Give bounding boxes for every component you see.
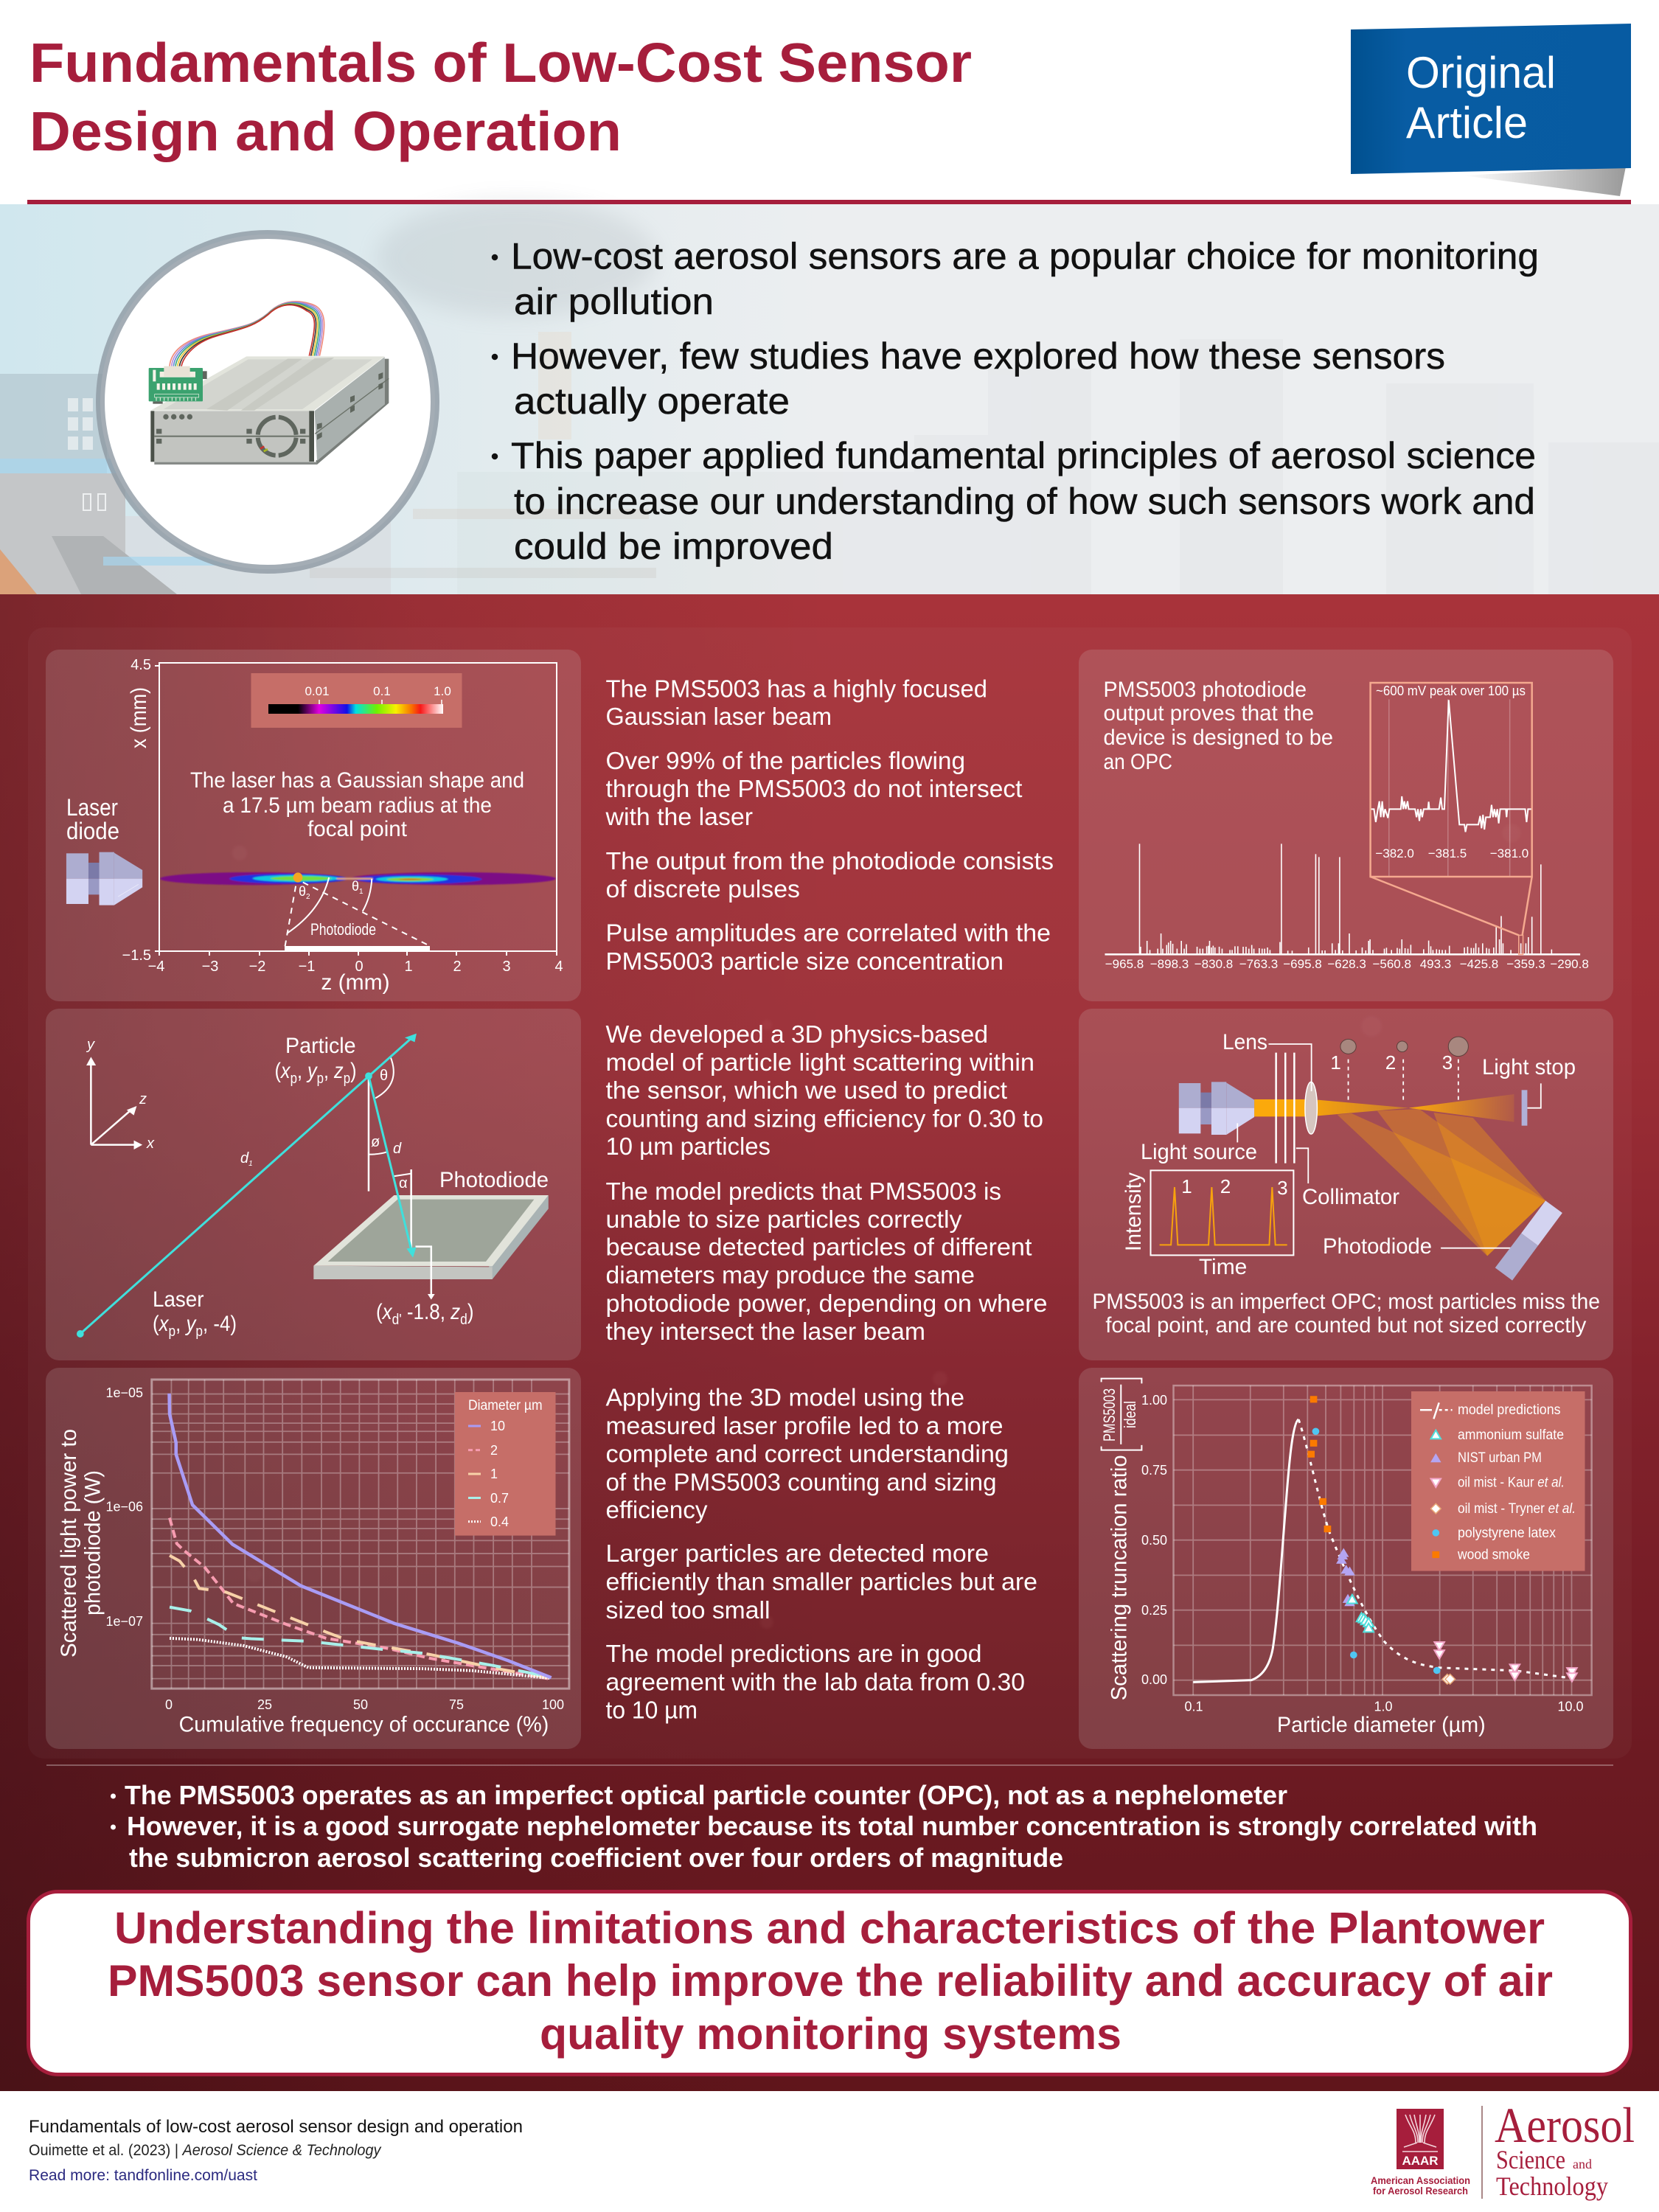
laser beam profile [160, 872, 556, 885]
beam annotation: a 17.5 µm beam radius at the [223, 793, 492, 818]
label: detector coordinate: -1.8, [402, 1300, 451, 1324]
text: 3D model description: 10 µm particles [606, 1133, 771, 1160]
legend: oil mist - Tryner et al. [1458, 1501, 1576, 1517]
logo: AAAR: for Aerosol Research [1373, 2185, 1468, 2197]
axis tick labels: −3 [202, 959, 218, 975]
text: laser and photodiode findings: Pulse amplitudes are correlated with the [606, 919, 1051, 947]
y axis fraction in brackets: PMS5003 [1100, 1388, 1119, 1441]
label: laser diode [66, 794, 119, 844]
model curve [1193, 1419, 1571, 1682]
angle labels: 1 [359, 888, 364, 896]
text: model results: measured laser profile led to a more [606, 1412, 1003, 1439]
logo: Aerosol Science and Technology [1495, 2097, 1635, 2201]
laser and scattering rays: d [240, 1150, 248, 1166]
laser and scattering rays: ø [371, 1134, 380, 1150]
diagram labels: Photodiode [1323, 1234, 1432, 1259]
axis tick labels: −1.5 [122, 947, 151, 964]
axis tick labels: −4 [148, 959, 164, 975]
text: 3D model description [606, 1020, 1047, 1345]
legend: Diameter µm [468, 1398, 543, 1413]
legend: 0.4 [490, 1514, 509, 1529]
axis tick labels: 4.5 [131, 657, 151, 673]
laser and scattering rays: α [399, 1175, 408, 1192]
colour scale legend: 0.01 [305, 684, 330, 698]
axis labels: 100 [542, 1697, 564, 1712]
text: laser and photodiode findings: PMS5003 particle size concentration [606, 947, 1004, 975]
legend: polystyrene latex [1458, 1526, 1556, 1541]
text: model results: sized too small [606, 1596, 770, 1624]
colour scale legend: 0.1 [373, 684, 391, 698]
axis tick labels: 0.00 [1141, 1672, 1167, 1687]
intro bullet points [492, 236, 1539, 567]
text: laser and photodiode findings: The output from the photodiode consists [606, 847, 1054, 874]
time axis labels: −763.3 [1239, 957, 1278, 971]
beam annotation: The laser has a Gaussian shape and [190, 768, 524, 793]
divider [46, 1764, 1613, 1766]
text: 3D model description: they intersect the laser beam [606, 1318, 925, 1345]
legend: 0.7 [490, 1491, 509, 1506]
y axis fraction in brackets: ideal [1121, 1401, 1139, 1428]
panel caption [1093, 1290, 1600, 1338]
label: detector coordinate: d [460, 1312, 467, 1328]
x axis title: Cumulative frequency of occurance (%) [179, 1713, 549, 1737]
time axis labels: −628.3 [1327, 957, 1366, 971]
legend [1411, 1391, 1585, 1571]
intro bullet points: This paper applied fundamental principles of aerosol science [511, 435, 1536, 476]
intensity inset [1151, 1170, 1293, 1255]
axis labels: 1e−05 [105, 1385, 143, 1400]
time axis labels: −695.8 [1283, 957, 1322, 971]
axis tick labels: −2 [249, 959, 265, 975]
text: laser and photodiode findings [605, 675, 1054, 975]
axis tick labels: 10.0 [1557, 1700, 1584, 1714]
label: particle: p [344, 1071, 350, 1087]
legend [455, 1392, 556, 1536]
particle numbers: 1 [1330, 1051, 1341, 1074]
logo: Aerosol Science and Technology: Science [1496, 2145, 1565, 2174]
label: detector coordinate: z [450, 1300, 460, 1324]
logo: Aerosol Science and Technology: and [1573, 2157, 1592, 2171]
plot frame and axes [155, 663, 557, 956]
coordinate axes: x [146, 1135, 155, 1152]
text: 3D model description: The model predicts that PMS5003 is [606, 1178, 1001, 1205]
light stop [1522, 1090, 1527, 1126]
y axis title [57, 1429, 105, 1658]
coordinate axes: z [139, 1091, 147, 1107]
laser and scattering rays: d [393, 1141, 402, 1157]
axis tick labels: 4 [554, 959, 563, 975]
label: laser: , [175, 1312, 187, 1336]
laser beam [1254, 1094, 1514, 1122]
axis title: z: z (mm) [321, 970, 390, 995]
label: particle [274, 1034, 357, 1087]
particle numbers [1181, 1051, 1453, 1199]
label: particle: Particle [285, 1034, 356, 1058]
logo: AAAR [1371, 2109, 1470, 2197]
label: particle: , [324, 1059, 334, 1083]
title: Design and Operation [29, 100, 622, 162]
logo: Aerosol Science and Technology: Technology [1496, 2171, 1608, 2201]
red background section [0, 594, 1659, 2091]
label: photodiode: Photodiode [439, 1168, 549, 1192]
intro bullet points: Low-cost aerosol sensors are a popular choice for monitoring [511, 236, 1539, 277]
text: 3D model description: model of particle light scattering within [606, 1048, 1034, 1076]
panel: imperfect OPC diagram [1079, 1009, 1613, 1360]
badge: original article: Original [1406, 48, 1556, 97]
title: Fundamentals of Low-Cost Sensor [29, 32, 972, 94]
intro panel: background city [0, 199, 1659, 595]
callout: conclusion: PMS5003 sensor can help improve the reliability and accuracy of air [108, 1956, 1553, 2006]
panel: scattered light chart [46, 1368, 581, 1749]
angle labels [299, 879, 364, 901]
legend: model predictions [1458, 1402, 1560, 1418]
label: particle: y [306, 1059, 318, 1083]
text: 3D model description: diameters may produce the same [606, 1262, 975, 1289]
axis tick labels: 1.0 [1374, 1700, 1393, 1714]
collimator and leader lines [1237, 1044, 1541, 1248]
photodiode [1495, 1200, 1562, 1281]
text: laser and photodiode findings: with the laser [605, 803, 753, 830]
label: photodiode: Photodiode [310, 920, 376, 939]
colour scale legend [251, 673, 462, 728]
axis labels [105, 1385, 564, 1712]
particles [1340, 1037, 1468, 1057]
particle numbers: 2 [1220, 1175, 1231, 1197]
text: 3D model description: the sensor, which we used to predict [606, 1077, 1007, 1104]
logo: AAAR: AAAR [1402, 2154, 1439, 2168]
text: model results: Applying the 3D model using the [606, 1384, 964, 1411]
axis tick labels: 0 [355, 959, 364, 975]
label: laser [153, 1287, 237, 1340]
logo divider [1481, 2106, 1483, 2199]
intro bullet points: actually operate [514, 380, 790, 422]
panel: 3D model geometry [46, 1009, 581, 1360]
scattering geometry lines [285, 877, 428, 946]
time axis labels [1105, 957, 1589, 971]
label: laser: , -4) [203, 1312, 237, 1336]
text: 3D model description: counting and sizing efficiency for 0.30 to [606, 1105, 1043, 1133]
diagram labels: Lens [1222, 1030, 1267, 1054]
label: laser: (x [153, 1312, 170, 1336]
legend: wood smoke [1457, 1548, 1530, 1563]
time axis labels: −359.3 [1506, 957, 1545, 971]
diagram labels: Intensity [1121, 1172, 1146, 1251]
panel text: an OPC [1103, 750, 1172, 774]
panel: truncation ratio chart [1079, 1368, 1613, 1749]
diagram labels [1121, 1030, 1576, 1279]
footer citation: Ouimette et al. (2023) | Aerosol Science & Technology [29, 2142, 382, 2159]
logo: AAAR: American Association [1371, 2174, 1470, 2186]
text: model results: The model predictions are in good [606, 1640, 982, 1667]
grid [1174, 1385, 1592, 1695]
scattered light beams [1338, 1109, 1545, 1256]
axis labels: 50 [353, 1697, 368, 1712]
axis labels: 0 [165, 1697, 173, 1712]
zoom inset: ~600 mV peak over 100 µs [1376, 684, 1526, 698]
axis tick labels [1141, 1393, 1584, 1714]
text: 3D model description: We developed a 3D physics-based [606, 1020, 988, 1048]
legend: 1 [490, 1467, 498, 1481]
label: particle: (x [274, 1059, 292, 1083]
text: laser and photodiode findings: Over 99% of the particles flowing [606, 747, 965, 774]
label: detector coordinate: d' [392, 1312, 402, 1328]
axis title: x: x (mm) [127, 687, 151, 748]
axis tick labels: 0.50 [1141, 1533, 1167, 1548]
diagram labels: Light source [1141, 1140, 1257, 1164]
zoom inset: −381.5 [1428, 846, 1467, 860]
axis tick labels: 1 [404, 959, 413, 975]
angle labels: 2 [306, 893, 310, 901]
axis tick labels: 2 [453, 959, 462, 975]
coordinate axes [86, 1037, 155, 1152]
time axis labels: −425.8 [1460, 957, 1498, 971]
zoom inset: −381.0 [1490, 846, 1528, 860]
text: model results: efficiency [606, 1496, 708, 1523]
time axis labels: −965.8 [1105, 957, 1144, 971]
colour scale legend: 1.0 [434, 684, 451, 698]
zoom inset [1371, 683, 1532, 954]
text: laser and photodiode findings: through the PMS5003 do not intersect [606, 775, 1022, 802]
text: 3D model description: because detected particles of different [606, 1233, 1032, 1261]
panel caption: focal point, and are counted but not sized correctly [1105, 1313, 1586, 1338]
panel text [1103, 678, 1333, 774]
text: laser and photodiode findings: Gaussian laser beam [606, 703, 832, 730]
axis tick labels: −1 [299, 959, 315, 975]
text: model results: Larger particles are detected more [606, 1540, 989, 1567]
callout: conclusion: Understanding the limitations and characteristics of the Plantower [114, 1904, 1545, 1953]
y axis title: photodiode (W) [81, 1470, 105, 1615]
pulse time series [1105, 844, 1580, 954]
diagram labels: Light stop [1482, 1055, 1576, 1079]
footer citation: Fundamentals of low-cost aerosol sensor design and operation [29, 2117, 523, 2137]
curves [170, 1394, 552, 1679]
callout: conclusion: quality monitoring systems [540, 2009, 1121, 2059]
beam annotation: focal point [307, 817, 408, 841]
axis tick labels: 0.75 [1141, 1463, 1167, 1478]
text: model results: to 10 µm [606, 1697, 698, 1724]
photodiode bar [285, 946, 430, 951]
time axis labels: −290.8 [1550, 957, 1589, 971]
intro bullet points: air pollution [514, 281, 714, 322]
label: detector coordinate: (x [376, 1300, 394, 1324]
axis labels: 1e−07 [105, 1614, 143, 1629]
intro bullet points: However, few studies have explored how these sensors [511, 335, 1445, 377]
particle numbers: 2 [1385, 1051, 1396, 1074]
text: 3D model description: photodiode power, depending on where [606, 1290, 1047, 1317]
summary bullets: the submicron aerosol scattering coefficient over four orders of magnitude [129, 1843, 1063, 1873]
label: laser diode: Laser [66, 794, 118, 821]
title [29, 32, 972, 162]
diagram labels: Time [1199, 1255, 1247, 1279]
angle labels: θ [299, 884, 306, 899]
icon: lens [1305, 1082, 1317, 1134]
text: model results: of the PMS5003 counting and sizing [606, 1469, 997, 1496]
beam annotation [190, 768, 524, 841]
intro bullet points: to increase our understanding of how such sensors work and [514, 481, 1535, 522]
panel: photodiode output [1079, 650, 1613, 1001]
legend: NIST urban PM [1458, 1450, 1542, 1466]
light path diagram [1151, 1037, 1562, 1281]
legend: oil mist - Kaur et al. [1458, 1475, 1565, 1491]
label: particle: p [317, 1071, 324, 1087]
particle numbers: 3 [1277, 1177, 1288, 1199]
laser and scattering rays: θ [380, 1068, 388, 1084]
label: particle: ) [350, 1059, 357, 1083]
badge: original article: Article [1406, 98, 1528, 147]
laser and scattering rays: 1 [248, 1160, 253, 1168]
label: laser: p [169, 1324, 175, 1340]
zoom inset: −382.0 [1375, 846, 1414, 860]
icon: laser diode [66, 852, 142, 905]
data points [1307, 1396, 1577, 1684]
text: model results: complete and correct understanding [606, 1440, 1009, 1467]
time axis labels: 493.3 [1420, 957, 1451, 971]
axis tick labels: 3 [502, 959, 511, 975]
badge: original article [1351, 24, 1631, 196]
text: laser and photodiode findings: of discrete pulses [606, 875, 800, 902]
footer citation: Read more: tandfonline.com/uast [29, 2167, 257, 2184]
text: model results [606, 1384, 1037, 1724]
axis labels: 1e−06 [105, 1500, 143, 1514]
legend: ammonium sulfate [1458, 1427, 1564, 1443]
y axis title: Scattering truncation ratio [1107, 1455, 1132, 1700]
particle numbers: 1 [1181, 1175, 1192, 1197]
label: particle: z [333, 1059, 344, 1083]
intro bullet points: could be improved [514, 526, 833, 567]
label: detector coordinate: ) [467, 1300, 473, 1324]
callout: conclusion [28, 1892, 1631, 2075]
label: particle: , [297, 1059, 307, 1083]
icon: PMS5003 sensor [149, 302, 389, 465]
time axis labels: −560.8 [1372, 957, 1411, 971]
header rule [27, 200, 1631, 204]
x axis title: Particle diameter (µm) [1277, 1713, 1486, 1737]
text: laser and photodiode findings: The PMS5003 has a highly focused [606, 675, 987, 703]
label: particle: p [291, 1071, 297, 1087]
y axis fraction in brackets [1100, 1379, 1141, 1450]
summary bullets: However, it is a good surrogate nephelometer because its total number concentration is strongly correlated with [127, 1811, 1537, 1841]
time axis labels: −898.3 [1150, 957, 1189, 971]
label: laser: p [195, 1324, 203, 1340]
label: laser: Laser [153, 1287, 204, 1312]
panel text: output proves that the [1103, 701, 1314, 726]
laser and scattering rays [77, 1034, 435, 1338]
legend: 10 [490, 1419, 505, 1433]
photodiode plate [313, 1195, 549, 1279]
label: laser: y [185, 1312, 197, 1336]
summary bullets [111, 1780, 1537, 1873]
text: model results: efficiently than smaller particles but are [606, 1568, 1037, 1596]
label: laser diode: diode [66, 818, 119, 844]
text: 3D model description: unable to size particles correctly [606, 1206, 962, 1233]
particle numbers: 3 [1442, 1051, 1453, 1074]
axis labels: 75 [449, 1697, 464, 1712]
axis tick labels: 0.1 [1184, 1700, 1203, 1714]
panel text: PMS5003 photodiode [1103, 678, 1307, 702]
text: model results: agreement with the lab data from 0.30 [606, 1669, 1025, 1696]
angle labels: θ [352, 879, 359, 894]
logo: Aerosol Science and Technology: Aerosol [1495, 2097, 1635, 2153]
coordinate axes: y [86, 1037, 95, 1053]
axis tick labels [122, 657, 563, 975]
axis tick labels: 0.25 [1141, 1603, 1167, 1618]
panel text: device is designed to be [1103, 726, 1333, 750]
grid [152, 1380, 569, 1688]
axis tick labels: 1.00 [1141, 1393, 1167, 1408]
panel caption: PMS5003 is an imperfect OPC; most particles miss the [1093, 1290, 1600, 1314]
footer citation [29, 2117, 523, 2184]
panel: laser profile [46, 650, 581, 1001]
diagram labels: Collimator [1302, 1185, 1399, 1209]
legend: 2 [490, 1443, 498, 1458]
icon: light source [1179, 1082, 1254, 1135]
summary bullets: The PMS5003 operates as an imperfect optical particle counter (OPC), not as a nephelometer [125, 1780, 1287, 1810]
axis labels: 25 [257, 1697, 272, 1712]
time axis labels: −830.8 [1194, 957, 1233, 971]
y axis title: Scattered light power to [57, 1429, 81, 1658]
circle with sensor illustration [100, 234, 435, 569]
